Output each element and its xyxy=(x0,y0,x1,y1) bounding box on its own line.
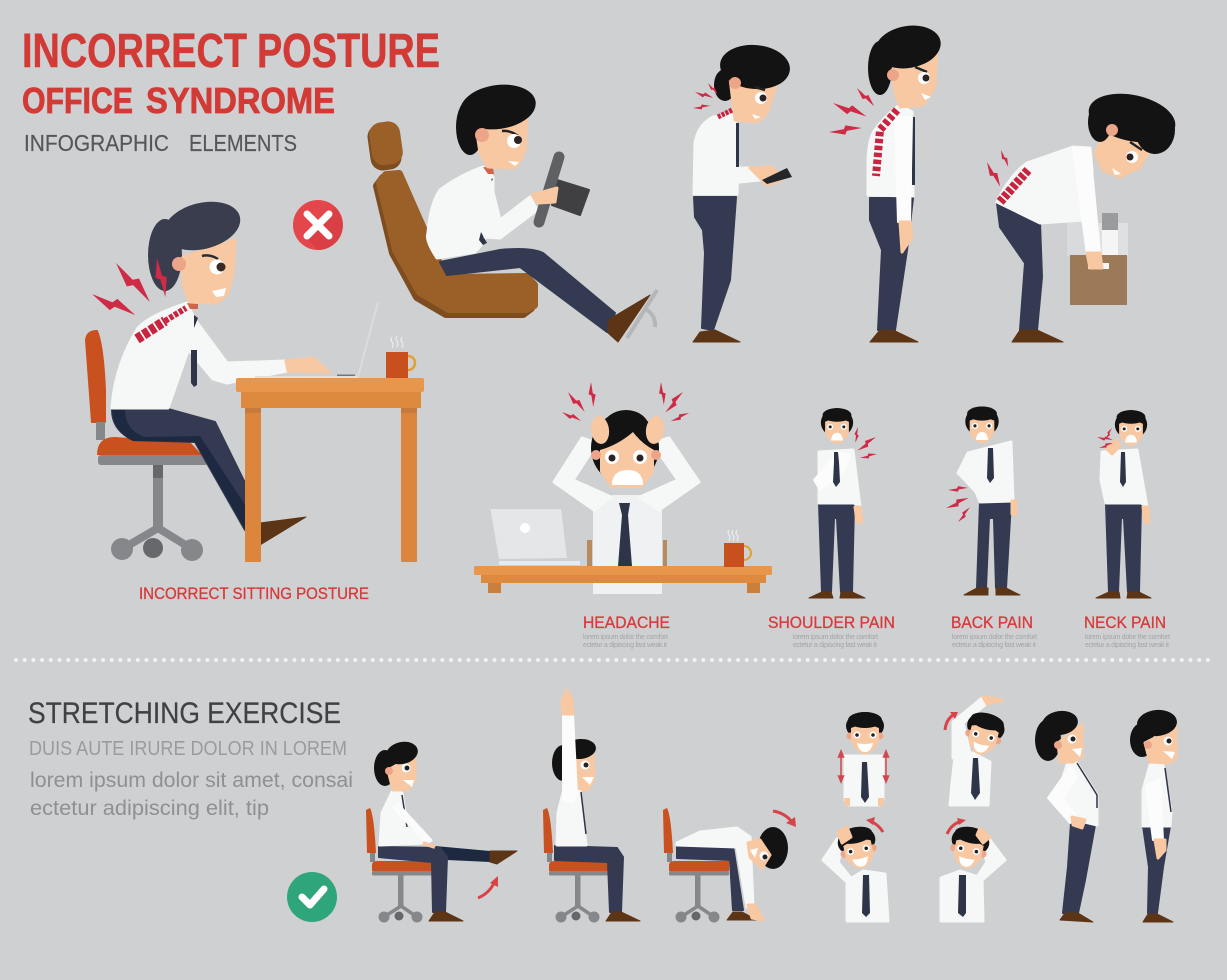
figure: neck stretch left xyxy=(823,817,888,921)
desk xyxy=(474,566,772,593)
symptom descriptions: lorem ipsum dolor the comfort xyxy=(793,634,878,641)
stretching exercise text block: lorem ipsum dolor sit amet, consai xyxy=(30,769,353,792)
figure: incorrect sitting at desk xyxy=(86,194,329,561)
arrow xyxy=(947,818,966,834)
symptom descriptions: lorem ipsum dolor the comfort xyxy=(583,634,668,641)
pain bolts xyxy=(984,149,1011,189)
icon: correct check xyxy=(287,872,337,922)
symptom labels: SHOULDER PAIN xyxy=(768,613,895,632)
trousers and shoe xyxy=(997,203,1042,330)
symptom descriptions: lorem ipsum dolor the comfort xyxy=(952,634,1037,641)
head xyxy=(946,824,992,872)
hand xyxy=(900,222,912,252)
symptom labels: BACK PAIN xyxy=(951,613,1033,632)
stretching exercise text block: DUIS AUTE IRURE DOLOR IN LOREM xyxy=(29,738,347,760)
figure: shoulder shrug xyxy=(838,712,888,806)
stretching exercise text block xyxy=(28,697,353,820)
head xyxy=(868,21,944,107)
neck pain marks xyxy=(718,110,732,117)
spine pain marks xyxy=(876,110,897,176)
title block: INCORRECT xyxy=(22,25,247,78)
stretching exercise text block: ectetur adipiscing elit, tip xyxy=(30,797,269,820)
figure: stooped standing with back pain xyxy=(828,21,944,342)
head xyxy=(552,738,597,790)
torso xyxy=(593,495,662,594)
symptom descriptions: ectetur a dipiscing fast weak it xyxy=(1085,642,1169,649)
label: incorrect sitting posture: INCORRECT SITTING POSTURE xyxy=(139,584,369,603)
pain bolts xyxy=(853,427,878,460)
trousers xyxy=(440,249,615,332)
head xyxy=(1084,86,1180,177)
legs xyxy=(435,846,490,862)
pain bolts xyxy=(828,86,877,137)
figure: shoulder pain xyxy=(809,408,878,598)
pain bolts xyxy=(89,257,171,321)
arrow xyxy=(773,811,796,827)
icon: incorrect cross xyxy=(293,200,343,250)
spine pain marks xyxy=(137,321,165,339)
tie xyxy=(191,315,198,387)
head xyxy=(1130,708,1178,763)
arrow xyxy=(478,876,498,898)
title block: ELEMENTS xyxy=(189,130,297,156)
box with papers xyxy=(1067,213,1128,305)
head xyxy=(965,407,999,443)
head xyxy=(1115,410,1147,446)
figure: neck pain xyxy=(1096,410,1151,598)
torso xyxy=(557,790,586,845)
car seat xyxy=(366,120,534,314)
shirt xyxy=(997,147,1092,223)
pain bolts xyxy=(1097,427,1114,450)
figure: side bend with arm over head xyxy=(945,697,1008,805)
symptom descriptions: ectetur a dipiscing fast weak it xyxy=(793,642,877,649)
coffee cup xyxy=(386,336,415,378)
raised arm xyxy=(562,690,577,802)
symptom descriptions: lorem ipsum dolor the comfort xyxy=(1085,634,1170,641)
raised arms xyxy=(554,438,611,510)
title block: SYNDROME xyxy=(146,80,335,121)
head xyxy=(1035,709,1082,762)
hand xyxy=(1087,253,1102,268)
tie xyxy=(618,503,632,566)
pedal xyxy=(627,290,657,338)
figure: bending to lift box xyxy=(984,86,1180,342)
figure: seated arm raise xyxy=(543,690,640,922)
stretching exercise text block: STRETCHING EXERCISE xyxy=(28,697,341,730)
symptom descriptions: ectetur a dipiscing fast weak it xyxy=(952,642,1036,649)
torso xyxy=(380,792,425,845)
hand xyxy=(286,358,329,372)
laptop xyxy=(490,509,580,565)
trousers and shoe xyxy=(694,197,736,330)
figure: standing back bend xyxy=(1035,709,1097,922)
head xyxy=(591,410,661,488)
phone in hand xyxy=(750,167,792,185)
spine pain marks xyxy=(1000,170,1028,202)
figure: headache at desk xyxy=(474,382,772,594)
figure: back pain xyxy=(945,407,1020,595)
figure: standing with phone xyxy=(693,42,792,342)
head xyxy=(835,824,881,872)
figure: standing upright xyxy=(1130,708,1178,922)
shoe xyxy=(608,295,650,342)
head xyxy=(821,408,853,444)
laptop xyxy=(255,302,378,378)
shoe xyxy=(260,517,306,545)
shirt xyxy=(694,115,738,194)
head xyxy=(714,42,792,122)
hand xyxy=(532,188,557,203)
figure: driving in car seat xyxy=(366,80,657,342)
trousers xyxy=(112,409,245,530)
symptom labels: NECK PAIN xyxy=(1084,613,1166,632)
chair back xyxy=(587,540,667,566)
shirt and arm xyxy=(427,167,493,258)
legs xyxy=(555,846,623,912)
head xyxy=(374,739,420,790)
figure: seated leg raise xyxy=(366,739,517,922)
symptom labels xyxy=(583,613,1166,632)
title block: OFFICE xyxy=(22,80,133,121)
shirt xyxy=(868,105,913,196)
head xyxy=(148,194,245,309)
arrow xyxy=(945,712,958,730)
desk xyxy=(236,378,424,562)
figure: neck stretch right xyxy=(941,818,1005,921)
coffee cup xyxy=(724,530,751,567)
pain bolts xyxy=(945,485,972,524)
hands on head xyxy=(589,415,611,445)
symptom descriptions: ectetur a dipiscing fast weak it xyxy=(583,642,667,649)
desk with laptop and cup xyxy=(236,302,424,562)
trousers and shoe xyxy=(870,198,913,330)
title block xyxy=(22,25,440,156)
steering wheel xyxy=(539,157,589,222)
head xyxy=(846,712,884,754)
head xyxy=(456,80,539,174)
pain bolts xyxy=(561,382,690,424)
title block: POSTURE xyxy=(257,25,440,78)
title block: INFOGRAPHIC xyxy=(24,130,169,156)
arrows xyxy=(838,751,888,782)
arrow xyxy=(866,817,883,832)
head xyxy=(748,827,788,869)
shirt xyxy=(112,303,195,408)
symptom labels: HEADACHE xyxy=(583,613,670,632)
office chair xyxy=(86,331,208,561)
figure: seated forward bend xyxy=(663,808,796,922)
legs xyxy=(677,846,743,910)
head xyxy=(960,709,1008,759)
pain bolts xyxy=(693,82,719,110)
symptom descriptions xyxy=(583,634,1170,649)
torso xyxy=(677,828,753,907)
